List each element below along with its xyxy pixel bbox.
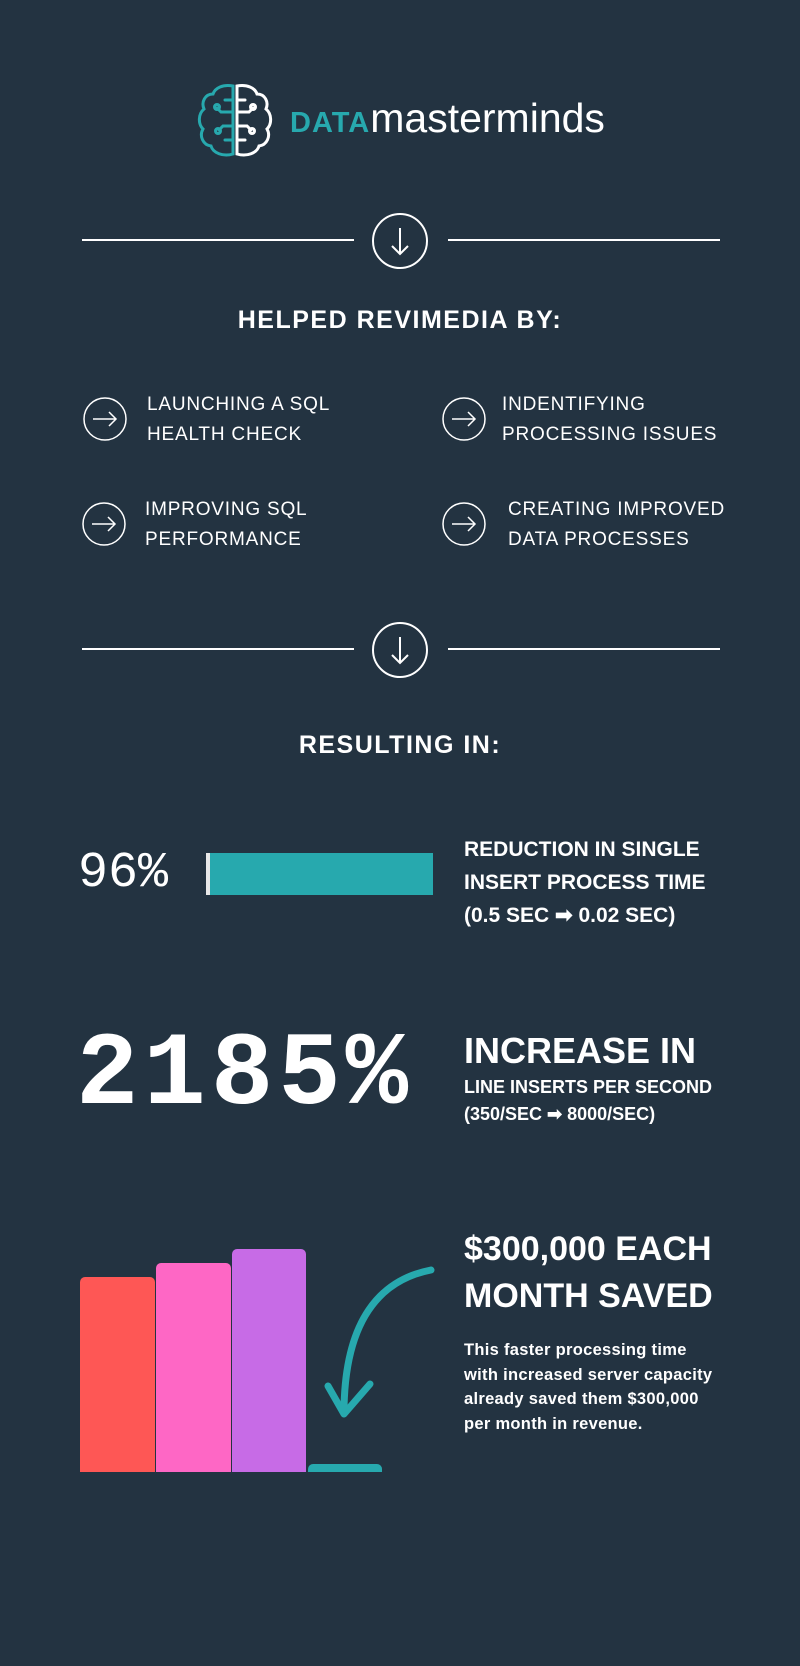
icon: down arrow circle	[372, 213, 428, 269]
savings heading: $300,000 EACH	[464, 1230, 712, 1268]
description: (0.5 SEC ➡ 0.02 SEC)	[464, 904, 675, 927]
item 4: CREATING IMPROVED	[508, 499, 725, 520]
item 3: PERFORMANCE	[145, 529, 302, 550]
item 1	[83, 394, 330, 445]
divider 2 with down arrow	[82, 622, 720, 678]
list of actions	[82, 394, 725, 550]
item 2: PROCESSING ISSUES	[502, 424, 717, 445]
savings paragraph: per month in revenue.	[464, 1414, 643, 1432]
description: LINE INSERTS PER SECOND	[464, 1077, 712, 1097]
savings paragraph	[464, 1341, 712, 1432]
arrow: curved down	[324, 1266, 434, 1418]
item 4	[442, 499, 725, 550]
heading: helped revimedia by: HELPED REVIMEDIA BY:	[238, 306, 562, 334]
item 1: HEALTH CHECK	[147, 424, 302, 445]
savings paragraph: This faster processing time	[464, 1341, 687, 1359]
savings heading: MONTH SAVED	[464, 1277, 713, 1315]
description: INCREASE IN	[464, 1030, 696, 1071]
savings heading	[464, 1230, 713, 1315]
stat 1: 96%	[78, 838, 706, 927]
description: INSERT PROCESS TIME	[464, 871, 706, 894]
description: REDUCTION IN SINGLE	[464, 838, 700, 861]
savings text	[464, 1230, 713, 1432]
item 3: IMPROVING SQL	[145, 499, 307, 520]
logo	[198, 84, 605, 156]
progress bar	[206, 853, 433, 895]
bar chart	[80, 1249, 382, 1472]
divider 1 with down arrow	[82, 213, 720, 269]
item 2	[442, 394, 717, 445]
description	[464, 838, 706, 927]
savings paragraph: with increased server capacity	[464, 1366, 712, 1384]
savings paragraph: already saved them $300,000	[464, 1390, 699, 1408]
big number 2185%: 2185%	[76, 1017, 413, 1135]
big number 96%: 96%	[78, 845, 168, 902]
item 1: LAUNCHING A SQL	[147, 394, 330, 415]
description: (350/SEC ➡ 8000/SEC)	[464, 1104, 655, 1124]
item 3	[82, 499, 307, 550]
logo text: DATAmasterminds	[290, 95, 605, 141]
icon: down arrow circle	[372, 622, 428, 678]
item 2: INDENTIFYING	[502, 394, 646, 415]
description	[464, 1030, 712, 1124]
icon: brain	[198, 84, 272, 156]
stat 2: 2185%	[76, 1017, 712, 1135]
heading: resulting in: RESULTING IN:	[299, 731, 501, 759]
item 4: DATA PROCESSES	[508, 529, 690, 550]
